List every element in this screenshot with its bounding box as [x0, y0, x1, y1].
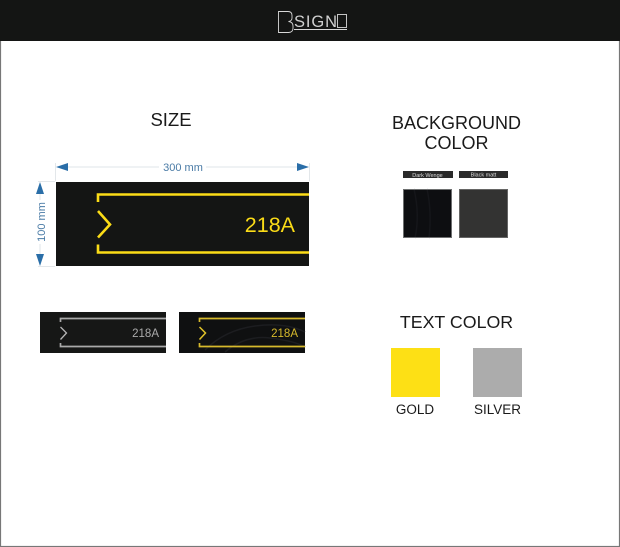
- swatch: black matt: Black matt: [471, 172, 497, 178]
- swatch: dark wenge: Dark Wenge: [412, 173, 443, 179]
- large door sign: gold on black: 218A: [245, 213, 296, 237]
- dimension: 300 mm width: [56, 162, 310, 181]
- small sign: gold on dark wenge: [179, 312, 305, 353]
- swatch: silver: [473, 348, 522, 417]
- dimension: 300 mm width: 300 mm: [163, 162, 203, 174]
- heading: size: SIZE: [150, 109, 192, 130]
- dimension: 100 mm height: [36, 182, 55, 266]
- small sign: silver on black matt: [40, 312, 166, 353]
- large door sign: gold on black: [56, 182, 309, 266]
- swatch: gold: [391, 348, 440, 417]
- swatch: black matt: [459, 171, 508, 238]
- heading: background color: BACKGROUND: [392, 113, 521, 133]
- header bar: [0, 0, 620, 41]
- swatch: dark wenge: [403, 171, 453, 238]
- swatch: gold: GOLD: [396, 402, 434, 417]
- small sign: silver on black matt: 218A: [132, 328, 159, 340]
- heading: background color: COLOR: [424, 133, 489, 153]
- logo: BSIGN: [278, 12, 347, 32]
- swatch: silver: SILVER: [474, 402, 521, 417]
- heading: text color: TEXT COLOR: [400, 312, 513, 332]
- logo: BSIGN: SIGN: [294, 13, 337, 31]
- dimension: 100 mm height: 100 mm: [36, 202, 48, 242]
- small sign: gold on dark wenge: 218A: [271, 328, 298, 340]
